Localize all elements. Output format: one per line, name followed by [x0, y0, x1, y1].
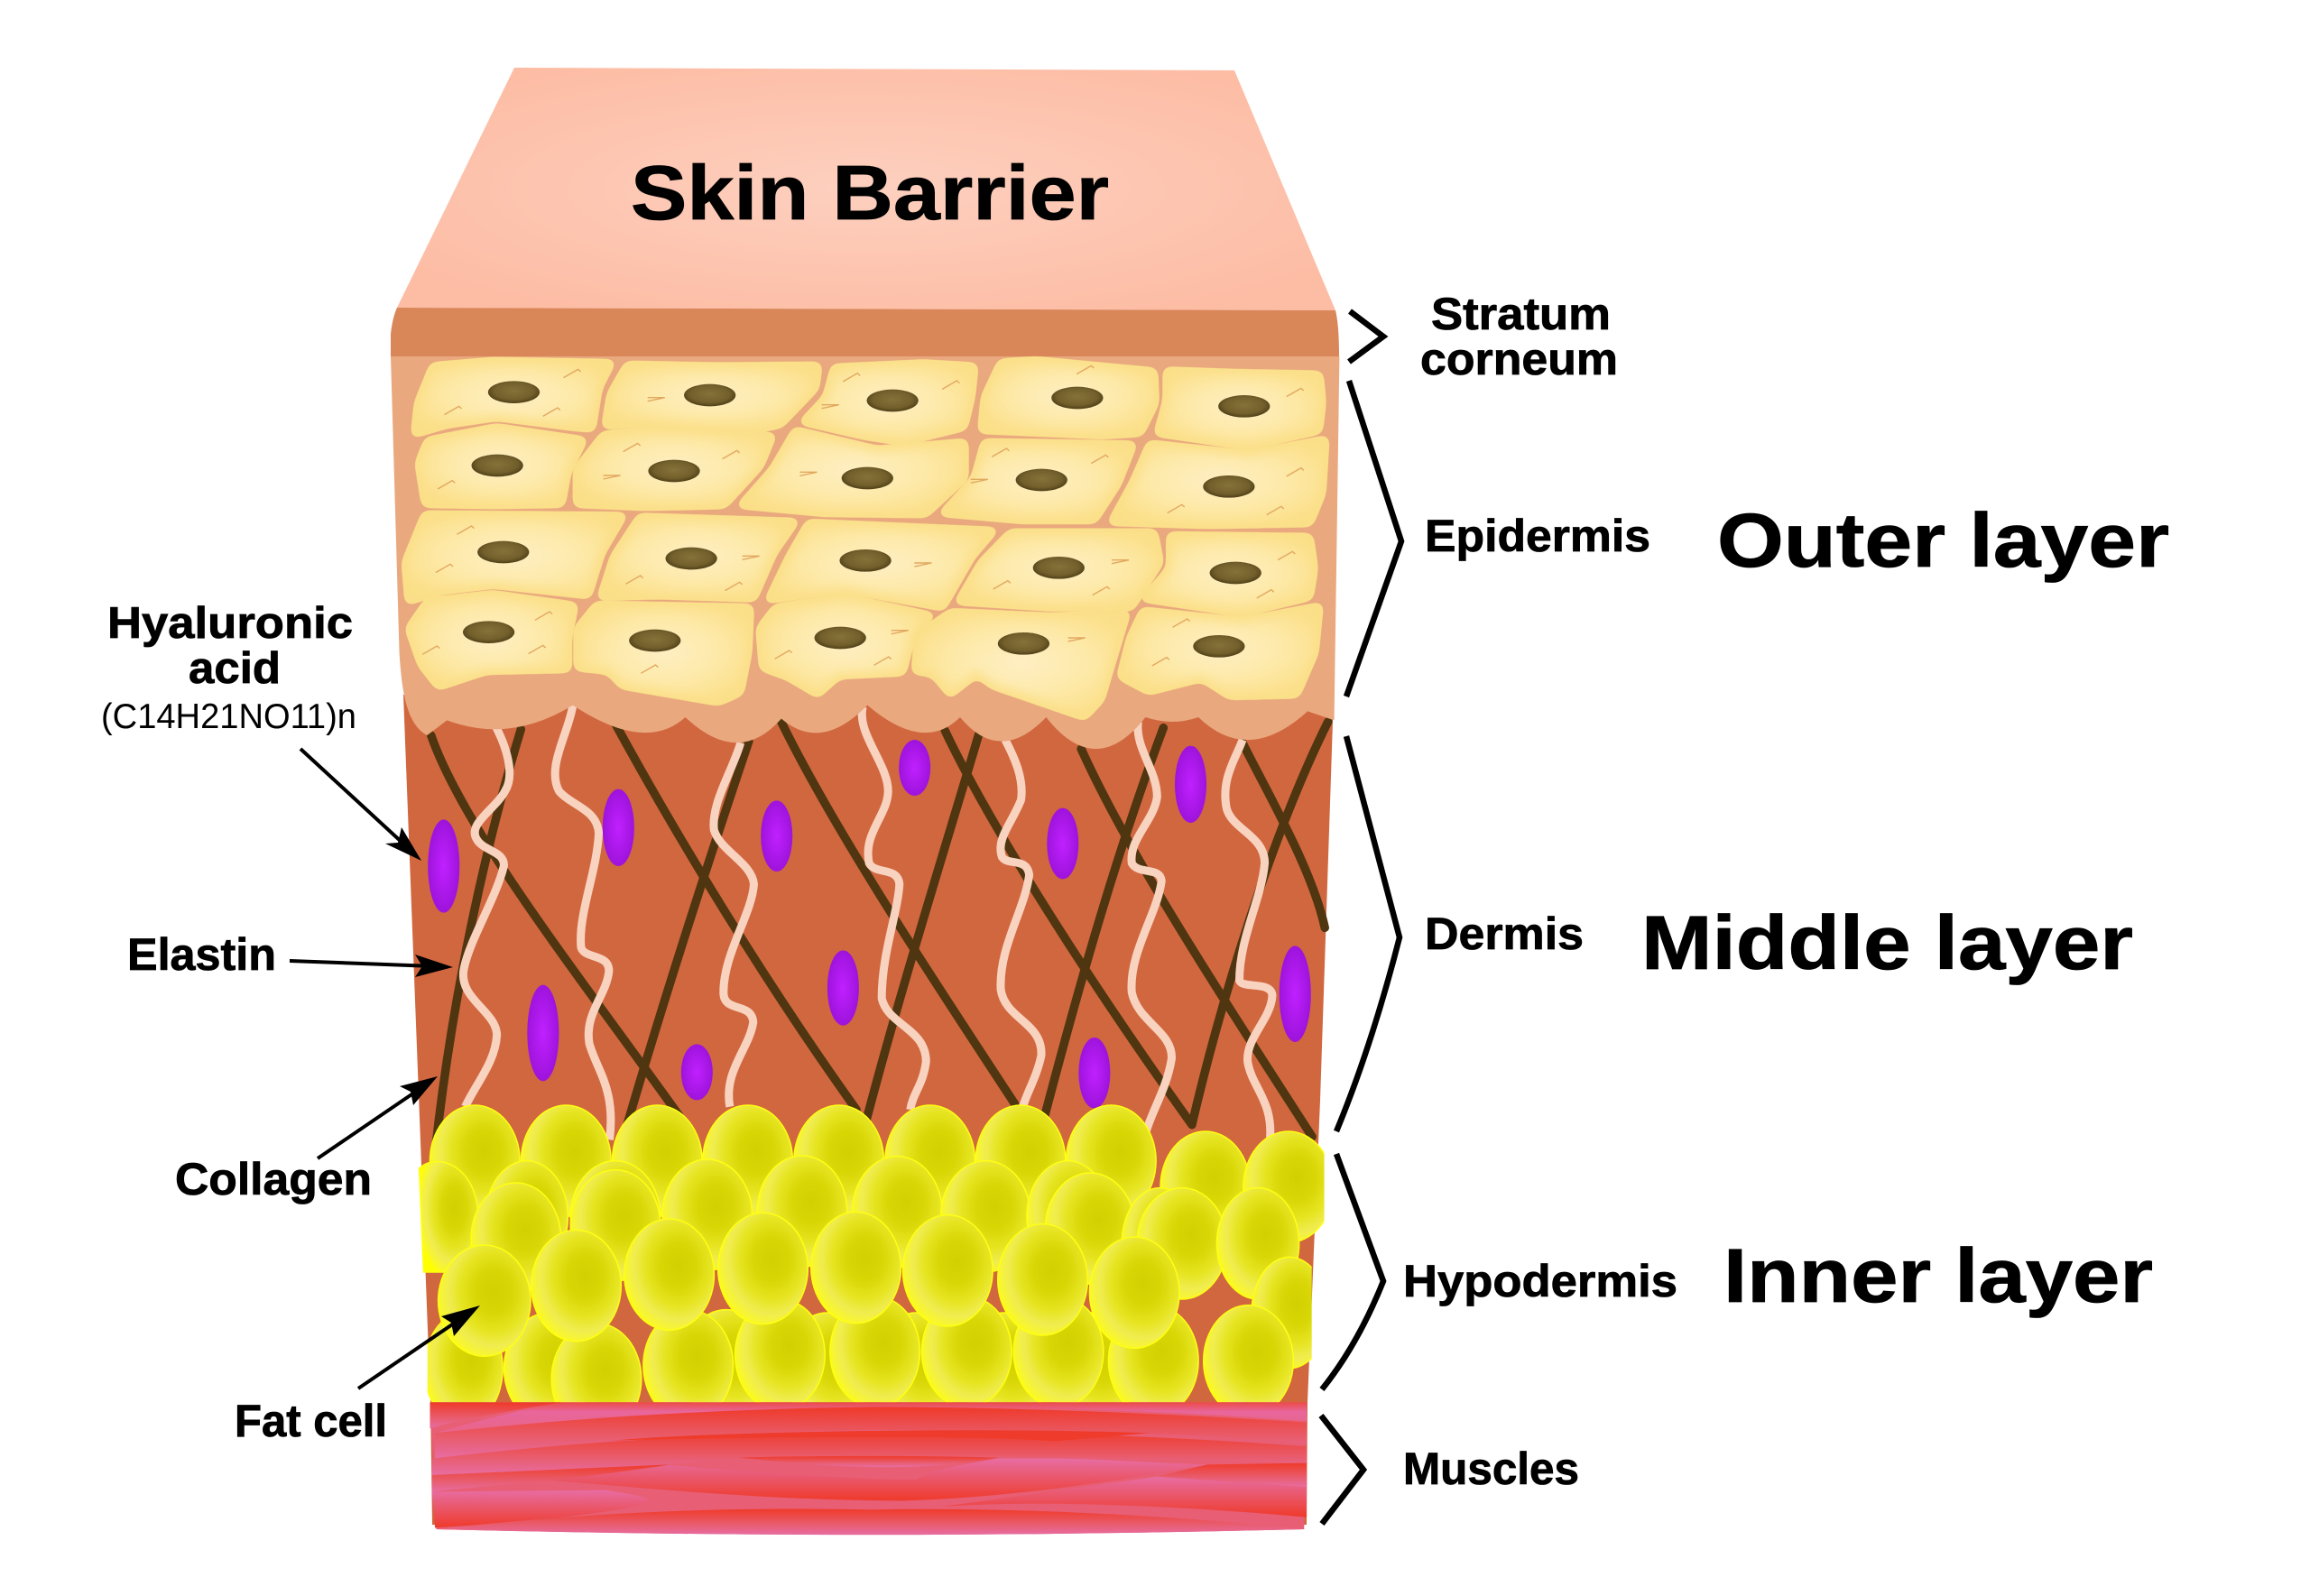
bracket: stratum corneum — [1349, 311, 1383, 362]
dermis background — [403, 695, 1334, 1525]
arrows — [290, 749, 480, 1388]
bracket: hypodermis — [1322, 1154, 1383, 1389]
bracket: epidermis — [1346, 381, 1401, 697]
label: hyaluronic acid — [101, 599, 356, 736]
label: stratum corneum — [1420, 289, 1618, 384]
arrow: elastin — [290, 955, 453, 977]
label: muscles: Muscles — [1403, 1444, 1579, 1494]
panel: stratum corneum — [391, 308, 1339, 356]
collagen fibers — [431, 720, 1328, 1149]
panel: skin surface — [397, 68, 1335, 310]
elastin fibers — [463, 706, 1272, 1143]
bracket: muscles — [1321, 1416, 1363, 1524]
label: hyaluronic acid: (C14H21NO11)n — [101, 697, 356, 736]
epidermal cells — [404, 360, 1326, 718]
arrow: fat cell — [358, 1305, 480, 1388]
label: epidermis: Epidermis — [1425, 511, 1650, 561]
label: stratum corneum: corneum — [1420, 334, 1618, 384]
arrow: hyaluronic acid — [300, 749, 421, 861]
epidermis background — [391, 356, 1339, 749]
label: fat cell: Fat cell — [235, 1396, 387, 1446]
label: elastin: Elastin — [127, 929, 276, 980]
cell surface marks — [422, 365, 1304, 673]
panel: hypodermis fat cells — [419, 1104, 1325, 1402]
label: stratum corneum: Stratum — [1431, 289, 1611, 339]
label: outer layer: Outer layer — [1717, 498, 2169, 583]
right labels — [1403, 289, 2169, 1494]
panel: muscle layer — [430, 1402, 1307, 1535]
label: middle layer: Middle layer — [1641, 900, 2133, 985]
arrow: collagen — [318, 1076, 438, 1158]
label: inner layer: Inner layer — [1723, 1233, 2153, 1318]
panel: dermis — [403, 695, 1334, 1525]
cell nuclei — [463, 381, 1270, 658]
brackets — [1321, 311, 1401, 1524]
label: collagen: Collagen — [175, 1154, 372, 1204]
label: hypodermis: Hypodermis — [1403, 1256, 1677, 1306]
title: Skin Barrier — [631, 151, 1109, 236]
panel: epidermis — [391, 356, 1339, 749]
label: hyaluronic acid: acid — [189, 644, 281, 693]
label: hyaluronic acid: Hyaluronic — [107, 599, 353, 648]
label: dermis: Dermis — [1425, 909, 1584, 959]
top surface face — [397, 68, 1335, 310]
left labels — [101, 599, 387, 1446]
hyaluronic acid cells — [428, 740, 1311, 1109]
bracket: dermis — [1336, 736, 1400, 1131]
